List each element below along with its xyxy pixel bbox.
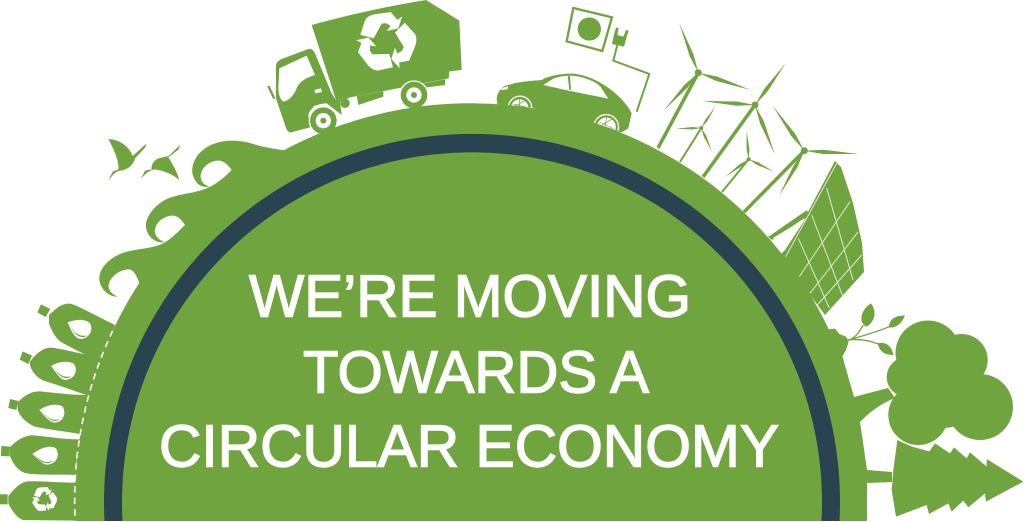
- car front wheel: [508, 96, 532, 109]
- navy arc: [104, 134, 840, 521]
- mirror: [268, 86, 274, 99]
- bird 2: [141, 145, 180, 180]
- title line 1: WE’RE MOVING: [249, 264, 691, 330]
- tree branches: [800, 340, 895, 521]
- stems: [847, 325, 893, 355]
- truck: [268, 0, 462, 135]
- title line 2: TOWARDS A: [303, 340, 650, 406]
- bottle 5: [0, 481, 77, 521]
- cargo box: [312, 0, 462, 100]
- bottle 4: [1, 435, 81, 475]
- bottle dashed seam: [75, 331, 113, 516]
- bottles: [0, 304, 115, 521]
- leaves: [861, 303, 875, 327]
- fuel tank: [340, 99, 350, 108]
- front wheel: [309, 106, 338, 135]
- small turbine 1: [676, 106, 716, 162]
- wheel arch: [313, 105, 336, 120]
- door handle: [314, 88, 322, 93]
- charging socket and plug: [567, 8, 649, 112]
- turbine 3: [744, 104, 858, 212]
- car: [497, 74, 632, 132]
- turbine 2: [702, 62, 787, 177]
- car rear wheel: [594, 115, 619, 131]
- cab: [276, 49, 445, 133]
- wind turbines: [658, 23, 858, 212]
- icon: recycling on bottle: [30, 487, 60, 515]
- waves: [99, 141, 303, 320]
- turbine 1: [658, 23, 751, 148]
- rear wheel: [399, 80, 429, 110]
- green dome: [75, 103, 867, 521]
- bush: [807, 318, 849, 363]
- cable: [613, 45, 649, 112]
- solar panel: [768, 161, 864, 315]
- title line 3: CIRCULAR ECONOMY: [159, 414, 779, 480]
- title: [159, 264, 779, 480]
- icon: recycling symbol: [349, 9, 427, 81]
- bottle 3: [8, 391, 90, 434]
- headlight: [501, 86, 508, 90]
- bottle 1: [37, 304, 115, 361]
- small turbine 2: [722, 131, 775, 192]
- birds: [108, 139, 180, 181]
- car body: [497, 74, 632, 132]
- trees: [800, 320, 1023, 521]
- sprout: [807, 303, 905, 363]
- bottle 2: [20, 348, 102, 395]
- cab window: [278, 56, 315, 102]
- bird 1: [108, 139, 147, 181]
- plug: [612, 27, 629, 47]
- socket: [567, 8, 612, 51]
- side windows: [543, 76, 608, 99]
- pine tree: [892, 440, 1023, 517]
- round tree: [887, 320, 1013, 445]
